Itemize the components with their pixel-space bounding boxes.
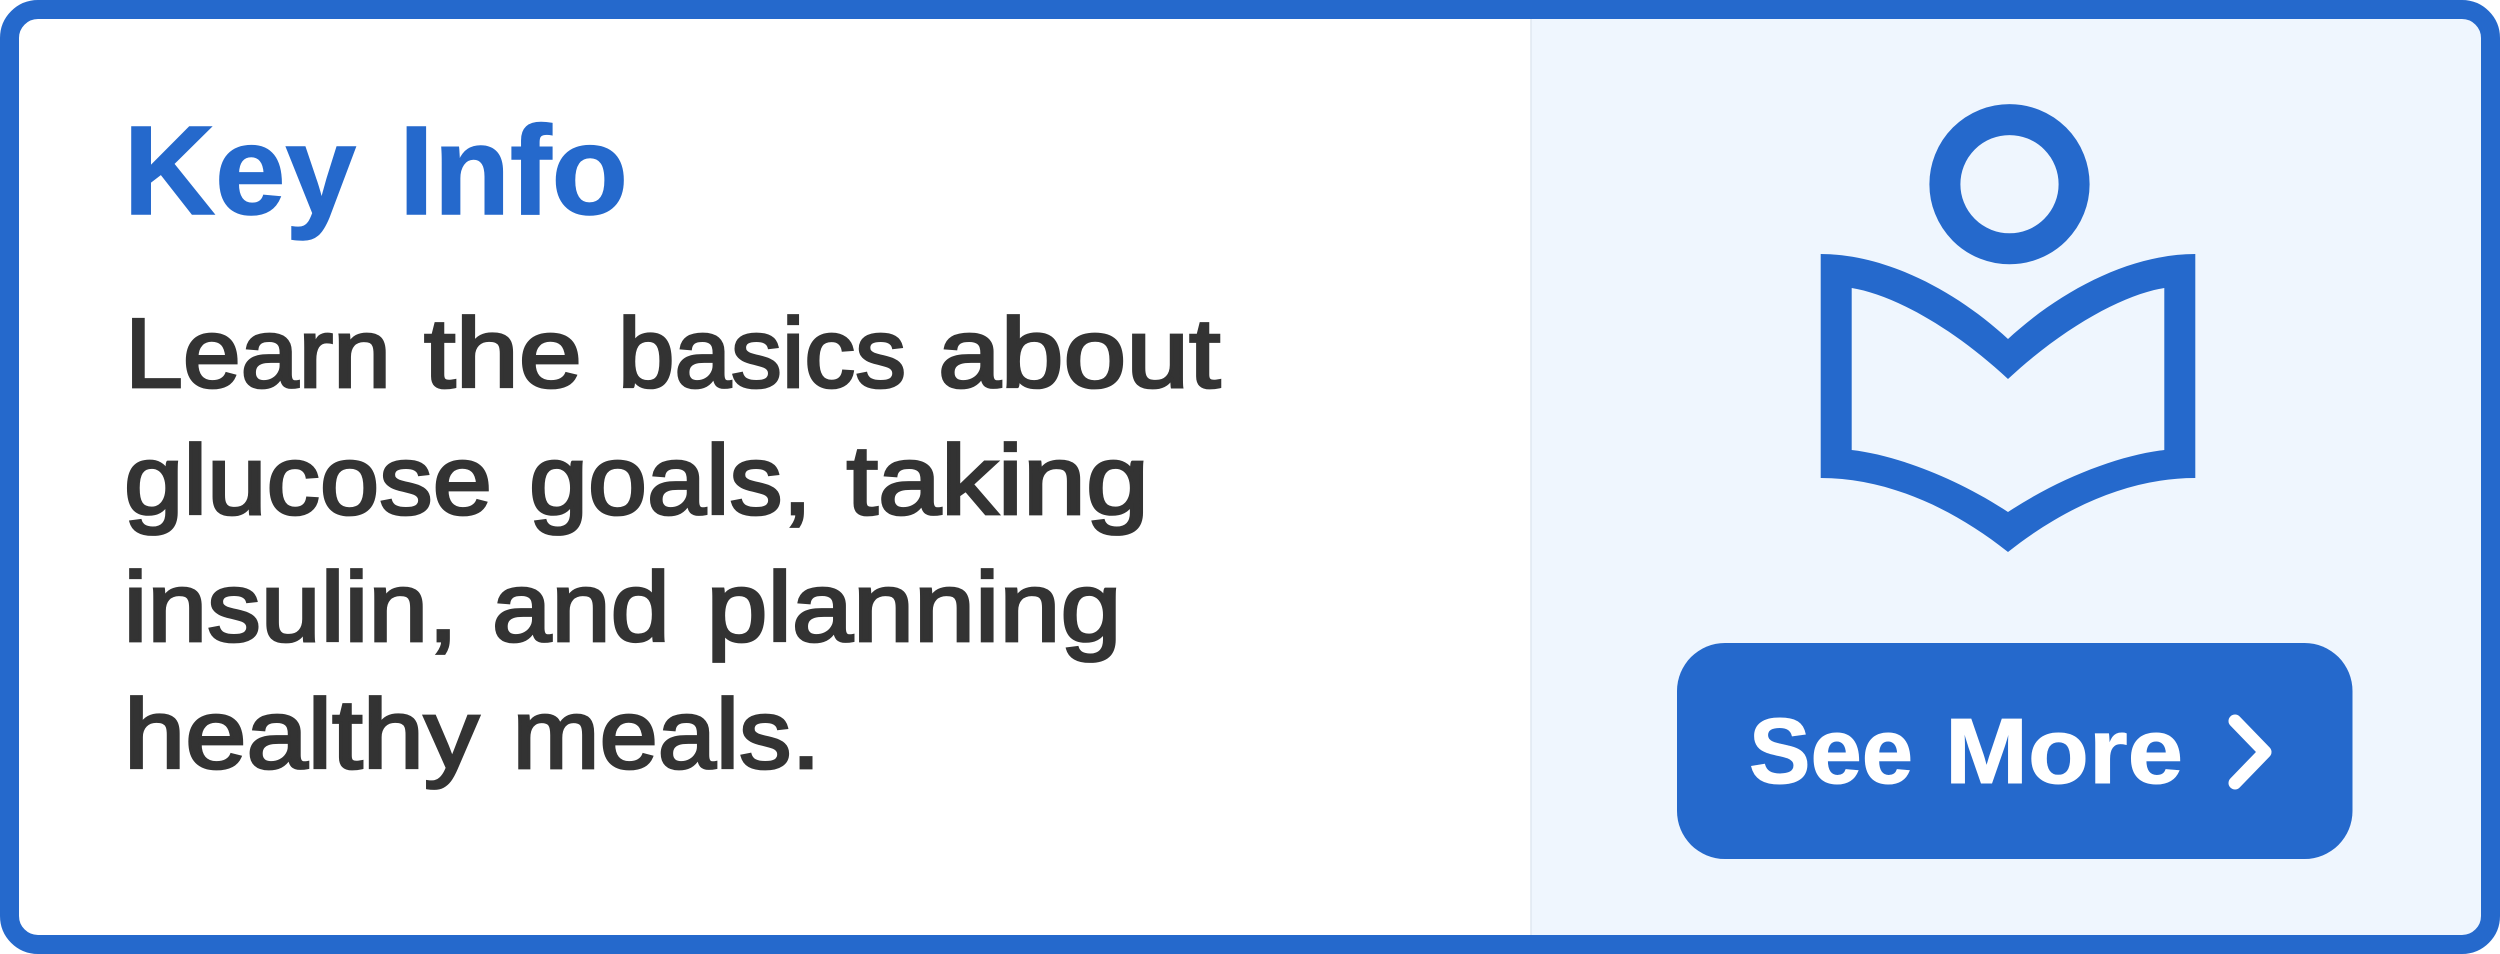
icon: chevron arrow	[2235, 721, 2265, 783]
button: See More	[1677, 643, 2352, 859]
text block: description: goals,	[529, 425, 812, 535]
panel: right tinted panel	[1531, 10, 2490, 944]
text block: description	[124, 298, 1220, 789]
text block: description: healthy	[124, 679, 479, 789]
button label: More: More	[1945, 699, 2183, 803]
text block: description: meals.	[512, 679, 820, 789]
heading: Key Info: Key	[124, 100, 356, 241]
heading: Key Info	[124, 100, 628, 241]
text block: description: glucose	[124, 425, 492, 535]
text block: description: insulin,	[124, 552, 458, 662]
button label: See: See	[1749, 699, 1913, 803]
icon: person reading book	[1821, 120, 2195, 552]
text block: description: the	[424, 298, 582, 408]
icon: head circle	[1945, 120, 2074, 249]
heading: Key Info: Info	[399, 100, 628, 241]
text block: description: planning	[706, 552, 1122, 662]
text block: description: about	[938, 298, 1220, 408]
text block: description: basics	[618, 298, 906, 408]
text block: description: taking	[846, 425, 1149, 535]
text block: description: Learn	[125, 298, 391, 408]
icon: open book	[1821, 254, 2195, 552]
text block: description: and	[492, 552, 670, 662]
